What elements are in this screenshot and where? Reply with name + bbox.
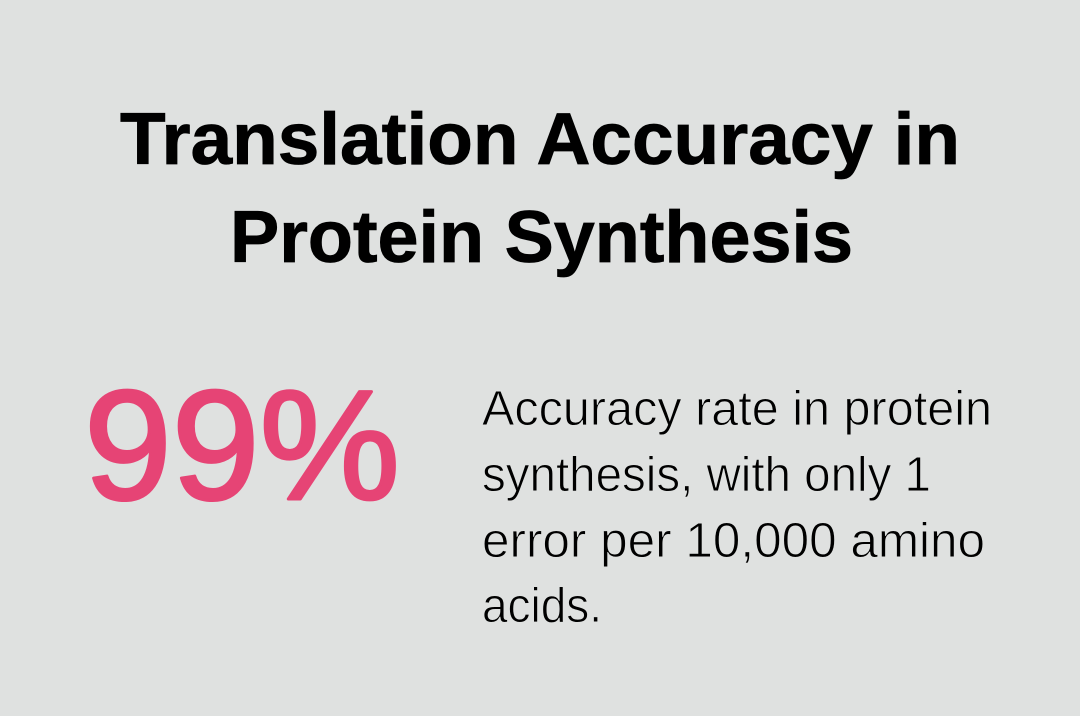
title: Protein Synthesis xyxy=(230,197,853,278)
title: Translation Accuracy in xyxy=(120,99,960,180)
description text: synthesis, with only 1 xyxy=(482,448,931,502)
title xyxy=(120,99,960,278)
description text: Accuracy rate in protein xyxy=(482,382,992,436)
description text: error per 10,000 amino xyxy=(482,514,985,568)
description text xyxy=(482,382,992,633)
statistic: 99%: 99% xyxy=(84,359,400,533)
description text: acids. xyxy=(482,579,602,633)
